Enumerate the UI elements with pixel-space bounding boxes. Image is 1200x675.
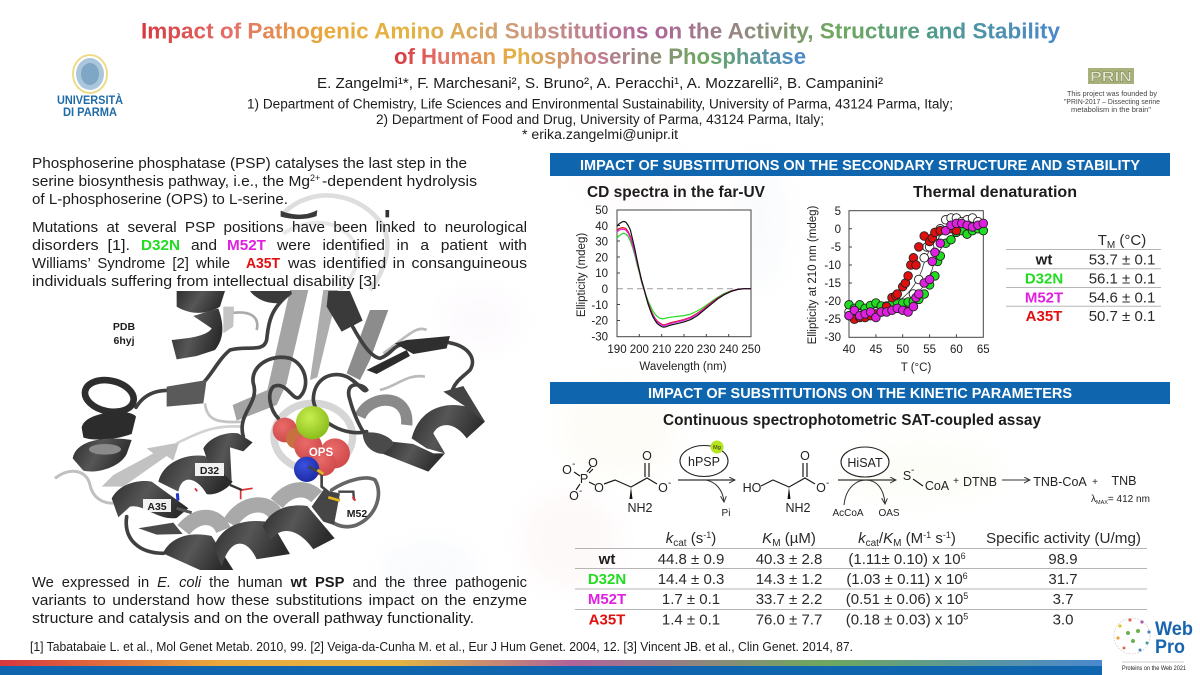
mutations paragraph: and <box>191 237 217 254</box>
row: M52T: M52T <box>588 591 626 608</box>
closing paragraph: variants to understand how these substitutions impact on the enzyme <box>32 592 527 609</box>
table: melting temperatures: (°C) <box>1115 232 1146 249</box>
table: melting temperatures: 54.6 ± 0.1 <box>1089 290 1155 306</box>
row: A35T: (0.18 ± 0.03) x 10 <box>846 612 963 628</box>
table: melting temperatures: M52T <box>1025 290 1063 306</box>
row: wt: (1.11± 0.10) x 10 <box>848 551 961 568</box>
thermal y axis labels <box>824 206 841 344</box>
products: CoA and TNB: DTNB <box>963 475 997 489</box>
table header: / <box>879 530 884 547</box>
section header: secondary structure and stability <box>550 153 1170 176</box>
CD y axis labels: 30 <box>595 236 608 248</box>
table header: (s <box>687 530 703 547</box>
molecule: phosphoserine: O <box>588 456 598 470</box>
CD y axis labels: 50 <box>595 205 608 217</box>
table header: K <box>762 530 773 547</box>
table: melting temperatures: M <box>1107 240 1115 251</box>
thermal x axis labels: 50 <box>896 344 909 356</box>
row: M52T: 3.7 <box>1053 591 1073 608</box>
table: melting temperatures: wt <box>1035 252 1052 268</box>
closing paragraph: structure and catalysis and on the overall pathway functionality. <box>32 610 474 627</box>
points: M52T <box>849 223 983 318</box>
molecule: phosphoserine: - <box>572 459 575 470</box>
table header: -1 <box>923 530 931 540</box>
D32 helix <box>158 455 233 494</box>
CD y axis labels: -30 <box>591 332 608 344</box>
closing paragraph: We expressed in E. coli the human wt PSP and the three pathogenic <box>32 574 527 591</box>
table header: -1 <box>943 530 951 540</box>
table header: K <box>883 530 894 547</box>
dark coil loops <box>126 293 472 553</box>
top helix <box>177 291 225 313</box>
thermal y axis labels: -5 <box>831 242 841 254</box>
row: D32N: (1.03 ± 0.11) x 10 <box>846 571 963 588</box>
thermal x axis labels: 65 <box>977 344 990 356</box>
molecule: phosphoserine <box>562 449 671 515</box>
products: CoA and TNB: - <box>911 465 914 476</box>
references: [1] Tabatabaie L. et al., Mol Genet Metab. 2010, 99. [2] Veiga-da-Cunha M. et al., Eur J Hum Genet. 2004, 12. [3] Vincent JB. et al., Clin Genet. 2014, 87. <box>30 640 853 654</box>
scatter chart: thermal denaturation: T (°C) <box>901 362 931 374</box>
products: CoA and TNB: + <box>1092 477 1098 488</box>
thermal y axis labels: 0 <box>835 224 841 236</box>
arrow: HiSAT step <box>832 480 900 519</box>
title: Impact of Pathogenic Amino Acid Substitutions on the Activity, Structure and Stability <box>141 18 1061 44</box>
mutations paragraph: D32N <box>141 237 180 254</box>
table header: (M <box>902 530 923 547</box>
thermal x axis labels: 40 <box>843 344 855 356</box>
pale ribbons rising behind text <box>283 195 387 290</box>
logo: Web Pro: Proteins on the Web 2021 <box>1122 666 1187 672</box>
row: D32N: 31.7 <box>1048 571 1078 588</box>
table header: (µM) <box>781 530 816 547</box>
affiliations: * erika.zangelmi@unipr.it <box>522 127 678 142</box>
footer colour band <box>0 660 1102 675</box>
arrow: hPSP step: Pi <box>722 508 730 519</box>
line chart: CD spectra <box>576 205 761 373</box>
mutations paragraph: M52T <box>227 237 266 254</box>
section header: kinetic parameters: IMPACT OF SUBSTITUTIONS ON THE KINETIC PARAMETERS <box>648 386 1072 402</box>
row: wt: 44.8 ± 0.9 <box>658 551 724 568</box>
logo: PRIN funding note: PRIN <box>1090 70 1132 86</box>
table header: k <box>666 530 675 547</box>
protein labels <box>113 321 367 520</box>
section header: kinetic parameters <box>550 382 1170 404</box>
mutations paragraph <box>32 219 527 290</box>
table header: s <box>931 530 943 547</box>
row: M52T: (0.51 ± 0.06) x 10 <box>846 591 963 608</box>
row: wt: 98.9 <box>1048 551 1078 568</box>
molecule: phosphoserine: P <box>580 472 588 486</box>
CD y axis labels: 10 <box>595 268 608 280</box>
table header <box>666 530 1141 549</box>
table header: M <box>772 538 781 549</box>
closing paragraph <box>32 574 527 627</box>
curve: M52T <box>617 229 751 326</box>
CD y axis labels: -20 <box>591 316 608 328</box>
products: CoA and TNB: λ <box>1091 494 1096 505</box>
curve: D32N <box>617 233 751 319</box>
row: wt <box>598 551 1078 568</box>
row: A35T: 76.0 ± 7.7 <box>756 612 822 628</box>
right helix and strands <box>383 442 445 472</box>
logo: University of Parma: UNIVERSITÀ <box>57 94 123 107</box>
arrow: HiSAT step: AcCoA <box>832 508 864 519</box>
mutations paragraph: Williams’ Syndrome [2] while <box>32 255 230 272</box>
molecule: phosphoserine: O <box>562 463 572 477</box>
section header: secondary structure and stability: IMPACT OF SUBSTITUTIONS ON THE SECONDARY STRUCTURE AND STABILITY <box>580 158 1140 174</box>
table: melting temperatures: 56.1 ± 0.1 <box>1089 270 1155 288</box>
title <box>141 18 1061 69</box>
table header: ) <box>711 530 716 547</box>
logo: University of Parma: DI PARMA <box>63 107 117 119</box>
molecule: phosphoserine: O <box>569 489 579 503</box>
enzyme: hPSP <box>680 440 728 476</box>
intro paragraph: of L-phosphoserine (OPS) to L-serine. <box>32 191 288 208</box>
table header: k <box>858 530 867 547</box>
thermal y axis labels: -30 <box>824 332 841 344</box>
logo: PRIN funding note: This project was founded by <box>1067 89 1157 98</box>
points: wt <box>849 218 978 314</box>
row: D32N: D32N <box>588 571 626 588</box>
molecule: serine: HO <box>743 481 762 495</box>
row: A35T <box>589 612 1073 628</box>
row: D32N <box>588 571 1078 588</box>
products: CoA and TNB: CoA <box>925 479 950 493</box>
row: A35T: 1.4 ± 0.1 <box>662 612 720 628</box>
table: kinetic parameters <box>575 530 1147 628</box>
logo: PRIN funding note <box>1064 68 1160 114</box>
thermal x axis labels: 60 <box>950 344 963 356</box>
molecule: serine <box>743 449 829 515</box>
intro paragraph: -dependent hydrolysis <box>322 173 477 190</box>
CD y axis labels <box>591 205 608 344</box>
line chart: CD spectra: Wavelength (nm) <box>639 361 727 373</box>
scatter chart: thermal denaturation: Ellipticity at 210 nm (mdeg) <box>807 205 819 344</box>
enzyme: hPSP: hPSP <box>688 455 720 469</box>
mutations paragraph: Mutations at several PSP positions have been linked to neurological <box>32 219 527 236</box>
affiliations <box>247 96 953 142</box>
protein labels: D32 <box>200 465 219 477</box>
row: wt: 6 <box>961 551 966 561</box>
row: M52T: 5 <box>963 591 968 601</box>
row: M52T: 1.7 ± 0.1 <box>662 591 720 608</box>
molecule: phosphoserine: NH2 <box>627 501 653 515</box>
CD y axis labels: 40 <box>595 221 608 233</box>
affiliations: 1) Department of Chemistry, Life Sciences and Environmental Sustainability, University of Parma, 43124 Parma, Italy; <box>247 96 953 112</box>
molecule: phosphoserine: - <box>668 478 671 489</box>
thermal x axis labels: 55 <box>923 344 936 356</box>
light strands <box>233 290 308 421</box>
protein labels: PDB <box>113 321 136 333</box>
row: M52T: 33.7 ± 2.2 <box>756 591 822 608</box>
products: CoA and TNB: TNB <box>1112 474 1136 488</box>
heading: CD spectra: CD spectra in the far-UV <box>587 184 766 201</box>
arrow: HiSAT step: OAS <box>878 508 900 519</box>
table: melting temperatures <box>1006 232 1161 325</box>
heading: thermal denaturation: Thermal denaturation <box>913 184 1077 201</box>
molecule: phosphoserine: O <box>658 481 668 495</box>
row: A35T: 3.0 <box>1053 612 1073 628</box>
protein labels: 6hyj <box>113 335 135 347</box>
intro paragraph: Phosphoserine phosphatase (PSP) catalyses the last step in the <box>32 155 467 172</box>
row: A35T: A35T <box>589 612 625 628</box>
CD x axis labels <box>607 344 761 356</box>
intro paragraph: serine biosynthesis pathway, i.e., the Mg <box>32 173 310 190</box>
table header: Specific activity (U/mg) <box>986 530 1141 547</box>
logo: PRIN funding note: metabolism in the brain" <box>1071 105 1151 114</box>
table: melting temperatures: A35T <box>1026 308 1062 325</box>
table header: cat <box>673 538 687 549</box>
molecule: serine: - <box>826 478 829 489</box>
row: wt: wt <box>598 551 615 568</box>
points: A35T <box>849 229 956 319</box>
logo: PRIN funding note: "PRIN-2017 – Dissecting serine <box>1064 97 1160 106</box>
molecule: serine: O <box>800 449 810 463</box>
row: D32N: 6 <box>963 571 968 581</box>
logo: Web Pro: Pro <box>1155 637 1185 658</box>
products: CoA and TNB: S <box>903 469 911 483</box>
logo: University of Parma <box>57 55 123 119</box>
title: of Human Phosphoserine Phosphatase <box>394 44 806 69</box>
thermal y axis labels: -15 <box>824 278 841 290</box>
table header: M <box>893 538 902 549</box>
thermal y axis labels: 5 <box>835 206 841 218</box>
row: D32N: 14.3 ± 1.2 <box>756 571 822 588</box>
affiliations: 2) Department of Food and Drug, University of Parma, 43124 Parma, Italy; <box>376 112 824 127</box>
CD x axis labels: 240 <box>719 344 738 356</box>
molecule: phosphoserine: O <box>642 449 652 463</box>
thermal x axis labels <box>843 344 990 356</box>
left helix <box>82 376 137 416</box>
enzyme: hPSP: Mg <box>713 445 721 451</box>
curve: wt <box>617 221 751 327</box>
mutations paragraph: individuals suffering from intellectual disability [3]. <box>32 273 381 290</box>
protein structure <box>55 195 485 570</box>
table header: ) <box>951 530 956 547</box>
reaction scheme <box>562 440 1150 519</box>
CD y axis labels: 0 <box>602 284 608 296</box>
curve: A35T <box>617 228 751 325</box>
products: CoA and TNB: = 412 nm <box>1108 494 1150 505</box>
thermal y axis labels: -10 <box>824 260 841 272</box>
authors: E. Zangelmi¹*, F. Marchesani², S. Bruno², A. Peracchi¹, A. Mozzarelli², B. Campanini² <box>317 75 883 92</box>
mutations paragraph: were identified in a patient with <box>276 237 527 254</box>
CD y axis labels: -10 <box>591 300 608 312</box>
intro paragraph <box>32 155 477 208</box>
enzyme: HiSAT <box>841 447 889 477</box>
molecule: serine: NH2 <box>785 501 811 515</box>
products: CoA and TNB: MAX <box>1096 500 1108 506</box>
row: D32N: 14.4 ± 0.3 <box>658 571 724 588</box>
mutations paragraph: was identified in consanguineous <box>287 255 527 272</box>
side chains <box>195 485 253 499</box>
OPS ligand spheres <box>273 406 350 482</box>
protein labels: OPS <box>309 447 333 459</box>
mutations paragraph: A35T <box>246 255 280 272</box>
CD x axis labels: 200 <box>630 344 649 356</box>
row: wt: 40.3 ± 2.8 <box>756 551 822 568</box>
table header: -1 <box>703 530 711 540</box>
CD x axis labels: 210 <box>652 344 671 356</box>
table: melting temperatures: 50.7 ± 0.1 <box>1089 308 1155 325</box>
row: M52T <box>588 591 1073 608</box>
mutations paragraph: disorders [1]. <box>32 237 130 254</box>
logo: Web Pro <box>1114 618 1193 672</box>
protein labels: A35 <box>147 501 167 513</box>
fit curves <box>849 222 983 311</box>
arrow: hPSP step <box>678 480 735 519</box>
molecule: phosphoserine: - <box>579 486 582 497</box>
table: melting temperatures: D32N <box>1025 270 1063 288</box>
CD x axis labels: 250 <box>741 344 761 356</box>
thermal y axis labels: -20 <box>824 296 841 308</box>
CD y axis labels: 20 <box>595 252 608 264</box>
enzyme: HiSAT: HiSAT <box>847 456 883 470</box>
logo: Web Pro: Web <box>1155 619 1193 640</box>
heading: assay: Continuous spectrophotometric SAT-coupled assay <box>663 412 1041 429</box>
thermal x axis labels: 45 <box>870 344 882 356</box>
products: CoA and TNB: TNB-CoA <box>1033 475 1087 489</box>
products: CoA and TNB <box>903 465 1150 506</box>
table header: cat <box>866 538 879 549</box>
background watermark <box>380 150 1000 600</box>
points: D32N <box>849 229 983 308</box>
scatter chart: thermal denaturation <box>807 205 990 374</box>
A35 helix <box>112 481 188 518</box>
CD x axis labels: 220 <box>674 344 694 356</box>
CD x axis labels: 230 <box>697 344 716 356</box>
table: melting temperatures: T <box>1098 232 1107 249</box>
products: CoA and TNB: + <box>953 476 959 487</box>
thermal y axis labels: -25 <box>824 314 841 326</box>
row: A35T: 5 <box>963 612 968 622</box>
protein labels: M52 <box>347 508 367 520</box>
line chart: CD spectra: Ellipticity (mdeg) <box>576 233 588 317</box>
bottom helix <box>163 534 233 570</box>
CD x axis labels: 190 <box>607 344 627 356</box>
molecule: serine: O <box>816 481 826 495</box>
table: melting temperatures: 53.7 ± 0.1 <box>1089 252 1155 268</box>
intro paragraph: 2+ <box>310 173 320 183</box>
molecule: phosphoserine: O <box>594 481 604 495</box>
